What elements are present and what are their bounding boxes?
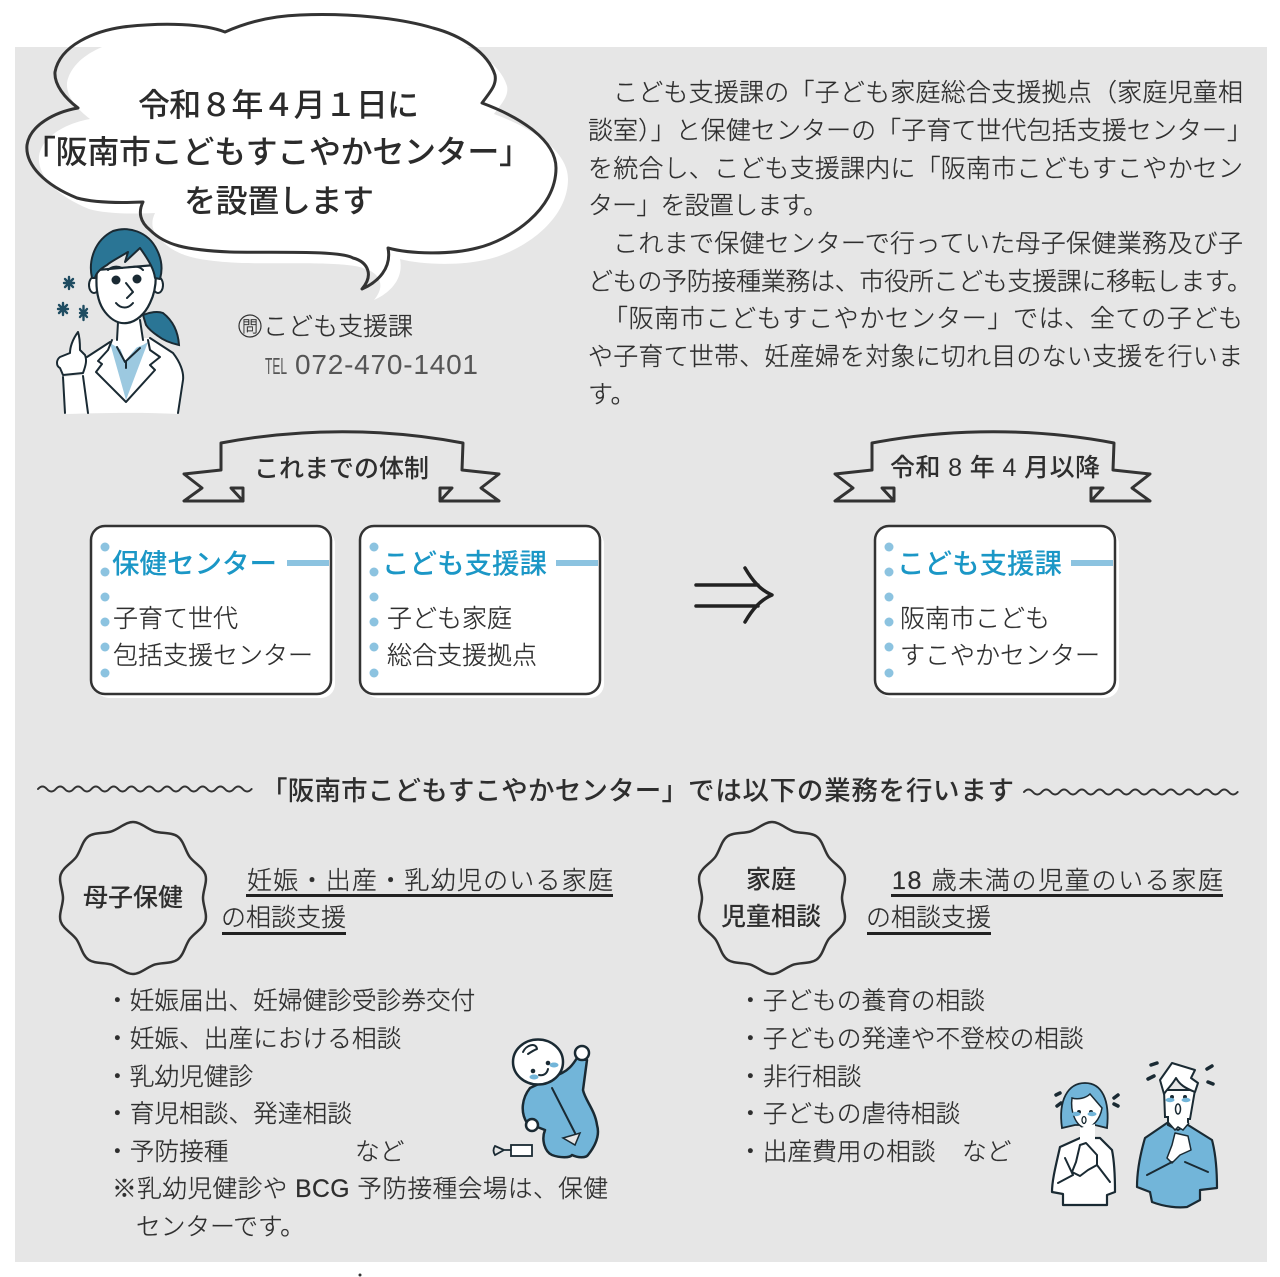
body paragraph: こども支援課の「子ども家庭総合支援拠点（家庭児童相 xyxy=(613,79,1243,107)
list: maternal services: など xyxy=(355,1139,404,1166)
contact information xyxy=(239,313,478,380)
illustration: worried couple xyxy=(1052,1063,1217,1207)
title line 1: 令和８年４月１日に xyxy=(138,87,419,123)
woman xyxy=(1052,1083,1118,1205)
body paragraph: や子育て世帯、妊産婦を対象に切れ目のない支援を行いま xyxy=(588,343,1243,371)
list: maternal services: ・妊娠、出産における相談 xyxy=(105,1025,401,1053)
icon: inquiry mark: 問 xyxy=(242,319,258,336)
title line 3: を設置します xyxy=(184,183,374,219)
heading: family support xyxy=(866,867,1223,935)
illustration: crawling baby xyxy=(494,1040,598,1157)
list: maternal services: ・妊娠届出、妊婦健診受診券交付 xyxy=(105,987,475,1015)
face xyxy=(96,265,156,323)
box: new child support division xyxy=(875,526,1119,698)
list: family services: ・非行相談 xyxy=(738,1063,861,1091)
sparkles xyxy=(58,277,87,320)
box: child support division xyxy=(360,526,604,698)
body paragraph: 「阪南市こどもすこやかセンター」では、全ての子ども xyxy=(603,305,1243,333)
box heading: こども支援課 xyxy=(897,548,1062,579)
box: child support division: 子ども家庭 xyxy=(387,605,512,633)
box heading: こども支援課 xyxy=(382,548,547,579)
badge: maternal and child health xyxy=(60,822,206,974)
heading: maternal support: 妊娠・出産・乳幼児のいる家庭 xyxy=(247,867,613,895)
coat xyxy=(63,338,183,414)
ears xyxy=(89,277,99,293)
ribbon: from April Reiwa 8: 令和 8 年 4 月以降 xyxy=(890,454,1100,482)
ribbon: previous system xyxy=(184,432,499,501)
list: family services: ・子どもの虐待相談 xyxy=(738,1100,960,1128)
badge: maternal and child health: 母子保健 xyxy=(83,884,183,912)
box: health center: 包括支援センター xyxy=(113,642,313,670)
man xyxy=(1137,1063,1217,1207)
contact phone number: 072-470-1401 xyxy=(295,349,478,380)
section heading with wavy lines: 「阪南市こどもすこやかセンター」 xyxy=(261,776,688,806)
body paragraph: 談室）」と保健センターの「子育て世代包括支援センター」 xyxy=(588,117,1252,145)
badge: family and child consultation: 家庭 xyxy=(746,866,796,894)
box: new child support division: 阪南市こども xyxy=(900,605,1050,633)
heading: family support: 18 歳未満の児童のいる家庭 xyxy=(892,867,1223,895)
neck xyxy=(117,318,143,361)
list: family services: ・子どもの養育の相談 xyxy=(738,987,985,1015)
box: health center xyxy=(91,526,335,698)
contact department: こども支援課 xyxy=(263,313,413,341)
ribbon: from April Reiwa 8 xyxy=(835,432,1150,501)
body paragraph: を統合し、こども支援課内に「阪南市こどもすこやかセン xyxy=(588,155,1243,183)
body paragraph: これまで保健センターで行っていた母子保健業務及び子 xyxy=(613,230,1243,258)
list: maternal services: ※乳幼児健診や BCG 予防接種会場は、保健 xyxy=(112,1175,608,1203)
body paragraph: ター」を設置します。 xyxy=(588,192,828,220)
icon: inquiry mark xyxy=(239,315,261,337)
ribbon: previous system: これまでの体制 xyxy=(254,455,429,483)
list: family services: ・出産費用の相談 xyxy=(738,1138,936,1166)
box: new child support division: すこやかセンター xyxy=(900,642,1100,670)
list: family services xyxy=(738,987,1084,1166)
hair xyxy=(91,229,162,279)
ponytail xyxy=(143,312,179,345)
heading: maternal support xyxy=(221,867,613,935)
heading: family support: の相談支援 xyxy=(866,904,991,932)
list: maternal services: ・育児相談、発達相談 xyxy=(105,1100,352,1128)
badge: family and child consultation: 児童相談 xyxy=(721,903,821,931)
body paragraph: す。 xyxy=(588,381,636,409)
section heading with wavy lines: では以下の業務を行います xyxy=(688,776,1014,806)
box: child support division: 総合支援拠点 xyxy=(387,642,537,670)
list: maternal services: ・予防接種 xyxy=(105,1138,228,1166)
body paragraph xyxy=(588,79,1252,409)
badge: family and child consultation xyxy=(699,822,845,974)
speech bubble with title xyxy=(24,15,568,300)
body paragraph: どもの予防接種業務は、市役所こども支援課に移転します。 xyxy=(588,268,1252,296)
list: maternal services: ・乳幼児健診 xyxy=(105,1063,253,1091)
list: maternal services xyxy=(105,987,608,1241)
illustration: doctor woman pointing xyxy=(57,229,183,414)
box heading: 保健センター xyxy=(112,548,277,579)
stray dot xyxy=(358,1274,362,1276)
arrow xyxy=(696,568,772,622)
box: health center: 子育て世代 xyxy=(113,605,238,633)
list: maternal services: センターです。 xyxy=(136,1214,305,1241)
lapels xyxy=(96,340,160,402)
list: family services: など xyxy=(962,1139,1011,1166)
heading: maternal support: の相談支援 xyxy=(221,904,346,932)
inner shirt xyxy=(110,342,148,400)
list: family services: ・子どもの発達や不登校の相談 xyxy=(738,1025,1084,1053)
hand xyxy=(57,332,86,375)
section heading with wavy lines xyxy=(38,776,1238,806)
title line 2: 「阪南市こどもすこやかセンター」 xyxy=(24,134,531,170)
contact tel label: TEL xyxy=(265,353,287,379)
